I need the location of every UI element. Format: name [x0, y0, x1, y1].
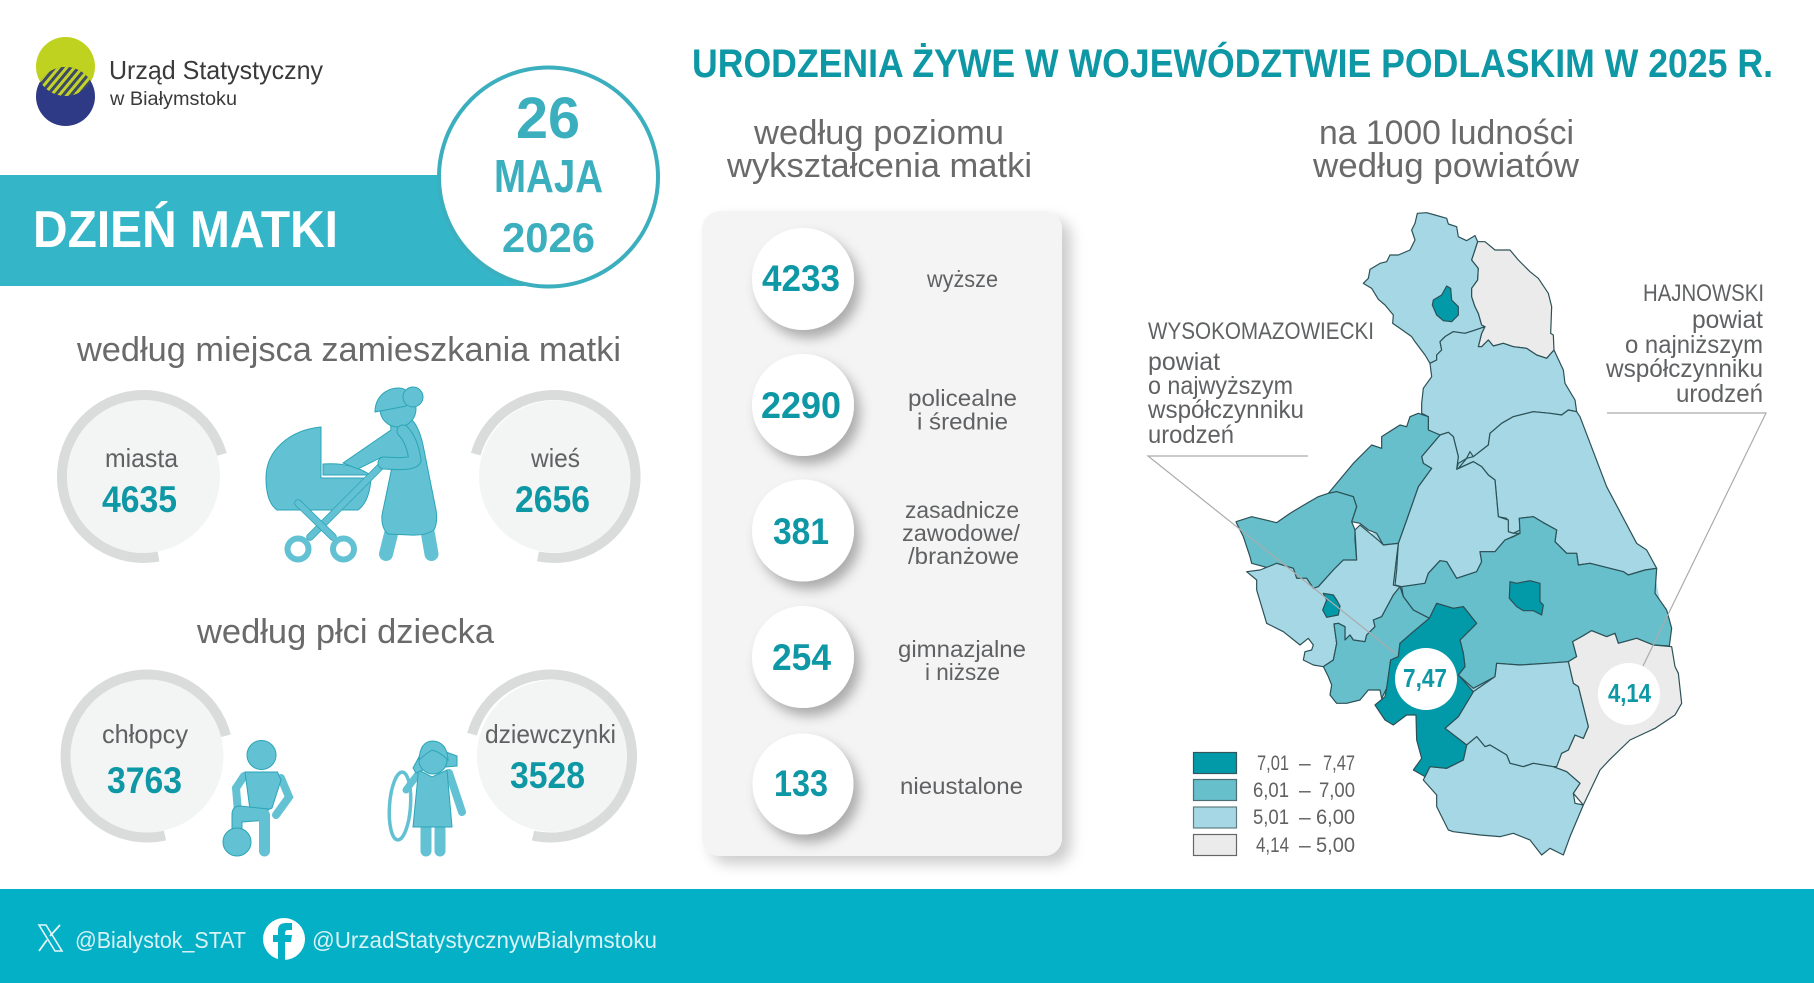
- region: city Suwałki: [1432, 286, 1458, 322]
- icon: Facebook: [263, 918, 305, 960]
- banner: Dzień Matki: DZIEŃ MATKI: [33, 201, 338, 259]
- banner: Dzień Matki: [0, 175, 560, 286]
- text: X handle: @Bialystok_STAT: [75, 927, 246, 953]
- value badge: 7,47: [1395, 648, 1457, 710]
- education row: zasadnicze zawodowe/branżowe: zasadnicze: [905, 497, 1019, 523]
- education row: zasadnicze zawodowe/branżowe: [752, 480, 1021, 582]
- region: east light: [1458, 410, 1657, 575]
- map legend: –: [1299, 752, 1311, 775]
- heading: według poziomu wykształcenia matki: według poziomu: [753, 114, 1004, 152]
- callout: Wysokomazowiecki: powiat: [1148, 348, 1220, 376]
- value badge: 4,14: [1598, 663, 1660, 725]
- education row: gimnazjalne i niższe: gimnazjalne: [898, 636, 1026, 662]
- icon: X: [39, 925, 62, 951]
- education row: gimnazjalne i niższe: 254: [772, 637, 831, 678]
- region: Wysokomazowiecki, highest rate: [1375, 603, 1477, 777]
- education row: nieustalone: 133: [774, 763, 828, 804]
- callout: Wysokomazowiecki: o najwyższym: [1148, 372, 1293, 400]
- heading: na 1000 ludności według powiatów: na 1000 ludności: [1319, 114, 1574, 152]
- text: Facebook handle: @UrzadStatystycznywBialymstoku: [312, 927, 657, 953]
- date badge: 26 maja 2026: 2026: [502, 214, 595, 261]
- stat ring: wieś: wieś: [530, 443, 580, 473]
- education row: wyższe: [752, 228, 998, 330]
- map legend: 5,00: [1316, 834, 1355, 857]
- heading: na 1000 ludności według powiatów: według powiatów: [1312, 147, 1579, 185]
- stat ring: miasta: 4635: [102, 479, 177, 520]
- date badge: 26 maja 2026: [439, 68, 658, 286]
- education row: policealne i średnie: i średnie: [917, 408, 1008, 434]
- education row: gimnazjalne i niższe: [752, 606, 1026, 708]
- education row: zasadnicze zawodowe/branżowe: /branżowe: [908, 543, 1019, 569]
- map legend: 7,01: [1257, 752, 1289, 775]
- map legend: 4,14: [1256, 834, 1289, 857]
- stat ring: wieś: 2656: [515, 479, 590, 520]
- choropleth map of powiats: [1236, 213, 1682, 855]
- region: city west: [1323, 593, 1340, 617]
- footer band: [0, 889, 1814, 983]
- education row: wyższe: 4233: [762, 258, 840, 299]
- education row: zasadnicze zawodowe/branżowe: 381: [773, 511, 829, 552]
- region: south-central light: [1445, 662, 1588, 767]
- map legend: [1194, 752, 1355, 857]
- map legend: 6,00: [1316, 806, 1355, 829]
- callout: Hajnowski: HAJNOWSKI: [1643, 280, 1764, 307]
- education row: policealne i średnie: policealne: [908, 385, 1017, 411]
- heading: według miejsca zamieszkania matki: według miejsca zamieszkania matki: [76, 331, 621, 369]
- education row: gimnazjalne i niższe: i niższe: [925, 659, 1000, 685]
- education row: nieustalone: [752, 734, 1023, 834]
- date badge: 26 maja 2026: MAJA: [494, 150, 603, 202]
- heading: na 1000 ludności według powiatów: [1312, 114, 1579, 185]
- region: central light: [1395, 432, 1520, 587]
- stat ring: dziewczynki: [472, 675, 632, 838]
- education row: wyższe: wyższe: [926, 266, 998, 292]
- callout: Hajnowski: współczynniku: [1605, 355, 1763, 383]
- callout: Wysokomazowiecki: współczynniku: [1147, 396, 1304, 424]
- region: south light: [1423, 737, 1583, 855]
- icon: boy with ball: [223, 740, 289, 856]
- stat ring: miasta: [62, 395, 222, 558]
- region: south-west green: [1323, 587, 1429, 703]
- map legend: 7,47: [1323, 752, 1355, 775]
- icon: girl with hoop: [387, 741, 462, 851]
- panel: education levels: [702, 211, 1062, 856]
- logo: Urząd Statystyczny w Białymstoku: w Białymstoku: [109, 89, 237, 110]
- heading: według poziomu wykształcenia matki: [726, 114, 1032, 185]
- stat ring: chłopcy: [66, 675, 226, 838]
- stat ring: chłopcy: chłopcy: [102, 719, 188, 749]
- heading: według poziomu wykształcenia matki: wykształcenia matki: [726, 147, 1032, 185]
- callout: Hajnowski: [1605, 280, 1766, 666]
- map legend: –: [1299, 834, 1311, 857]
- callout: Hajnowski: o najniższym: [1625, 331, 1763, 359]
- stat ring: chłopcy: 3763: [107, 760, 182, 801]
- icon: mother with stroller: [266, 387, 437, 560]
- region: south-east grey: [1553, 631, 1682, 805]
- callout: Wysokomazowiecki: urodzeń: [1148, 421, 1234, 449]
- education row: policealne i średnie: [752, 354, 1017, 456]
- region: west green: [1236, 492, 1357, 588]
- region: city Białystok: [1509, 581, 1543, 615]
- map legend: –: [1299, 779, 1311, 802]
- value badge: 7,47: 7,47: [1403, 663, 1447, 693]
- education row: policealne i średnie: 2290: [761, 385, 841, 426]
- map legend: –: [1299, 806, 1311, 829]
- map legend: 5,01: [1253, 806, 1289, 829]
- callout: Wysokomazowiecki: WYSOKOMAZOWIECKI: [1148, 318, 1374, 345]
- stat ring: dziewczynki: dziewczynki: [485, 719, 616, 749]
- map legend: 6,01: [1253, 779, 1289, 802]
- date badge: 26 maja 2026: 26: [516, 86, 580, 151]
- region: north large light: [1422, 327, 1577, 469]
- education row: zasadnicze zawodowe/branżowe: zawodowe/: [902, 520, 1021, 546]
- education row: nieustalone: nieustalone: [900, 773, 1023, 799]
- stat ring: wieś: [476, 395, 636, 558]
- stat ring: miasta: miasta: [105, 443, 179, 473]
- value badge: 4,14: 4,14: [1608, 678, 1651, 708]
- heading: według płci dziecka: według płci dziecka: [196, 613, 494, 651]
- region: north-west light: [1363, 213, 1485, 363]
- callout: Hajnowski: urodzeń: [1676, 380, 1763, 408]
- callout: Wysokomazowiecki: [1147, 318, 1395, 653]
- region: north grey: [1472, 242, 1554, 358]
- logo: Urząd Statystyczny w Białymstoku: Urząd Statystyczny: [109, 55, 323, 85]
- logo: Urząd Statystyczny w Białymstoku: [36, 37, 323, 126]
- callout: Hajnowski: powiat: [1692, 306, 1763, 334]
- region: north-west green: [1328, 413, 1440, 545]
- stat ring: dziewczynki: 3528: [510, 755, 585, 796]
- map legend: 7,00: [1319, 779, 1355, 802]
- region: central-east green: [1402, 517, 1672, 688]
- region: south-west light: [1247, 525, 1400, 667]
